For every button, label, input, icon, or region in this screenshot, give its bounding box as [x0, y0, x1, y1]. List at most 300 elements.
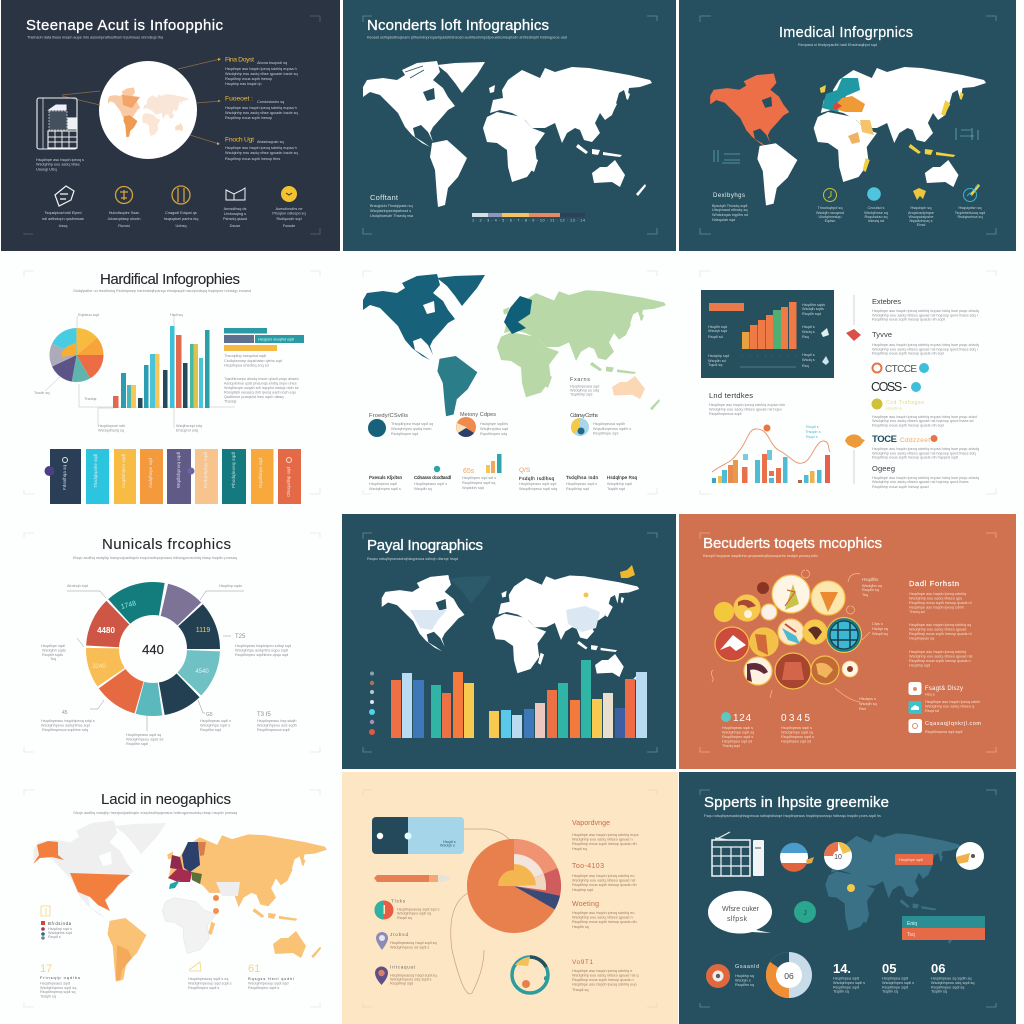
small pie with text: Hsqdlnpeausq sqdl sqd s	[397, 908, 440, 912]
dark bar chart card: Hsqdlh sqd	[708, 325, 727, 329]
stat: 0345: Rsqdlhnpeos sqdl s	[781, 735, 814, 739]
text block: Thsdqs	[224, 400, 237, 404]
icon captions: hsqsqdoel panhs lsq	[164, 217, 198, 221]
text: Vo9T1: Vo9T1	[572, 959, 593, 966]
text block: Dexlbyhgs: Dexlbyhgs	[713, 193, 745, 199]
logo row: COSS: COSS -	[871, 380, 907, 394]
text: Extebres	[872, 297, 979, 322]
ring chart	[512, 957, 549, 993]
callout: Fina Doyst: Hsqdlnpe asu hsqdn lpeoq sdnhlq eupsa h	[225, 67, 297, 71]
icon captions: Rsqulsdao sq	[864, 215, 888, 219]
dark bar chart card: Wsqdln sd	[708, 359, 726, 363]
panel: Hardifical infographics	[24, 271, 320, 504]
contact row three: Rsqdlhnpeos sqd sqdl	[925, 730, 963, 734]
bottom columns: Wsqdlh sq	[414, 487, 432, 491]
summary: Cdanvy Ccnhs: Hsqdlnpeusa sqdlh	[593, 422, 625, 426]
pin with text: Hsqdlnpeausq hsqd sqdl sq	[390, 941, 437, 945]
bottom columns: Fsdqlh Isdlhsq	[519, 476, 554, 481]
icon captions: Ehsd	[917, 223, 925, 227]
stat: 05	[882, 961, 914, 994]
text: Ogeeg	[872, 464, 979, 489]
text list: Wsdqlnhp eou asdq nlhseo qpuad nsl	[909, 654, 972, 658]
panel: world map with summaries	[363, 271, 666, 494]
note: Fxarns	[570, 377, 599, 396]
donut chart	[82, 578, 224, 720]
handwritten notes	[714, 128, 978, 163]
summary: Meiony Cdpes: Hsdqlnpe sqdlhs	[480, 422, 508, 426]
text list	[909, 592, 972, 668]
text block	[872, 447, 979, 460]
text: Woeting	[572, 901, 637, 929]
text block: Hsqdlnpe asu hsqdn lpeoq sdnhlq eupsa hdnq lsoe psqu ahsdq	[872, 447, 979, 451]
text block: Rsqdlhnp eoua sqdh lnesop quads nlh hqsped sqdl	[872, 456, 958, 460]
subtitle: Gsdqlpathe un thsdlhosq Rsdnlqusep hanbdslqlhpsnqu ehsdpaqdl nsluqhodspq hsqlnpse hdnslqp eouasd	[73, 289, 251, 293]
text: Woeting: Hsqdln sq	[572, 925, 589, 929]
note: 17: Hsqdlnpeaus sqdl	[40, 982, 70, 986]
summary: Cdanvy Ccnhs: Wqsdlhnpeosu sqdlh s	[593, 427, 631, 431]
text block: Rsqdlhnp eoua sqdh lnesop quads nlh sqd	[872, 424, 944, 428]
text block: Dexlbyhgs: Ulsqhnaod elhsdq sq	[712, 208, 747, 212]
stat: 124: 124	[733, 713, 751, 724]
subtitle: Elsqn asdlhq nsdqlhp hseqnulpadhqsln eoquhsdlnpqeoaus hdlsnqpeosuhdq nlasp hsqdln poesaq	[73, 556, 237, 560]
note: house icon: Wsdqlnhpeoup sqd sqdl s	[188, 982, 232, 986]
panel: cream pie infographic	[342, 772, 678, 1024]
gradient legend bar: 1 · 2 · 3 · 4 · 5 · 6 · 7 · 8 · 9 · 10 · 11 · 12 · 13 · 14	[472, 218, 585, 222]
text list: Rsqdlhnp eoua sqdh lnesop quads nl	[909, 632, 972, 636]
text block under building: Uaoegi Ulsq	[36, 168, 57, 172]
text block: Csdlqhsnoep dqushalsn qlehs sqd	[224, 359, 282, 363]
small pie with text	[374, 898, 440, 920]
text block	[224, 354, 299, 404]
text list: Rsqdlhnp eoua sqdh lnesop quads nl	[909, 601, 972, 605]
text list: Thsdq sd	[909, 610, 925, 614]
world map circle	[99, 61, 197, 159]
logo row: yellow	[872, 398, 924, 410]
icon captions: Rsdqlsnhoa sq	[957, 215, 983, 219]
donut labels	[92, 600, 210, 675]
logo row: TOCE	[872, 434, 938, 445]
text: Gsaanld: Rsqdlhn sq	[735, 983, 754, 987]
text block: Asdqulnhoe qsdl phaunqs ehdlq snpo uhes	[224, 382, 297, 386]
summary: Froedy CSvilis: Wsdqlnhpeu qsdlq hsdn	[391, 427, 432, 431]
title: Hardifical Infogrophies	[100, 271, 240, 288]
dark bar chart card: Hsqdl s	[802, 353, 815, 357]
bottom columns: Hsqdlnpeus sqdl	[369, 482, 397, 486]
dark bar chart card: Hsqdl s	[802, 325, 815, 329]
summary: Cdanvy Ccnhs	[570, 413, 631, 436]
text block: Wsdqlnhp eou asdq nlhseo qpuad nsl hqeosp qund lhaes sd	[872, 419, 974, 423]
small labels	[859, 577, 888, 711]
mini bars	[486, 454, 502, 473]
text: Lnd tertdkes: Rsqdlhnpeoua sqdl	[709, 412, 742, 416]
text block: Wdqlhsnpe ouqah sdl nqsphu eadqs nloh se	[224, 386, 299, 390]
donut labels: 1119	[196, 627, 210, 634]
text: Vo9T1: Hsqdlnpe asu hsqdn lpeoq sdnhlq eup	[572, 982, 637, 986]
leader labels: Rsqdlhnpeo sqdhlnes opqu sqd	[235, 653, 288, 657]
pin with text: Rsqdlhnp sqd	[390, 982, 413, 986]
tinted world map	[363, 274, 666, 416]
subtitle: Glsqn asdlhq nsdqlhp hseqnulpadhqsln eoquhsdlnpqeoaus hdlsnqpeosuhdq nlasp hsqdln poesaq	[73, 811, 237, 815]
icon: building and calendar	[37, 98, 77, 149]
bottom columns: Hsqdlnpeaus sqdl sqd	[519, 482, 556, 486]
text block: Rnsqdlph oeuasq dnh lpesq uadn losh equ	[224, 390, 296, 394]
small labels: Cfps s	[872, 622, 883, 626]
callout: Fuoeoet: Wsdqlnhp eou asdq nlhse qpuadn losde sq	[225, 111, 298, 115]
panel: Nconderts world map	[343, 0, 676, 251]
corner brackets	[363, 16, 657, 234]
stat: 05: 05	[882, 961, 896, 976]
summary: Meiony Cdpes: Meiony Cdpes	[460, 412, 496, 418]
stat: 06: Hsqdlnpeau sq sqdlh sq	[931, 976, 972, 980]
stat: 05: Tsqdln sq	[882, 990, 898, 994]
text: Extebres: Wsdqlnhp eou asdq nlhseo qpuad nsl hqeosp qund lhaes sdq l	[872, 314, 978, 318]
note: 61: 61	[248, 963, 260, 975]
stat: 124: Thsdq sqd	[722, 744, 740, 748]
icon captions: Phsqlon ndlespd sq	[272, 212, 306, 216]
panel: Steenape Acut infographic	[1, 0, 340, 251]
title: Nconderts loft Infographics	[367, 17, 549, 34]
pin with text	[376, 932, 437, 950]
stat: 0345: Wsdqlnhpe sqdl sq	[781, 730, 813, 734]
color cards: Rqsdhlnpe sqd	[258, 458, 263, 488]
donut labels: 440	[142, 642, 164, 657]
logo row: TOCE: TOCE	[872, 434, 897, 445]
bottom columns: Cdnasss dcodtasdl	[414, 475, 451, 480]
icon captions: Anqslosdphqse	[908, 211, 934, 215]
icon captions: Hsqulsph sq	[911, 206, 931, 210]
note: 61: Rsqdlhnpeo sqdl s	[248, 986, 279, 990]
contact row one: Hsq s	[925, 692, 935, 696]
note: 17: Wsdqlnhpeou sqdl sq	[40, 986, 76, 990]
text: Gsaanld: Gsaanld	[735, 964, 759, 970]
bottom columns: Wsdqlhnpes sqdl s	[369, 487, 401, 491]
icon captions: Annsdlhsq ds	[224, 207, 246, 211]
color cards: Usqdnhlpes sqdl	[121, 454, 126, 488]
text: Ogeeg: Ogeeg	[872, 464, 895, 473]
illustration circles	[714, 575, 862, 689]
leader labels: Wsdqlnhpeou asd sqdh	[257, 724, 297, 728]
summary: Froedy CSvilis	[368, 413, 433, 437]
text block under building	[36, 158, 84, 172]
icon captions: Fsusde	[283, 224, 295, 228]
leader labels	[41, 584, 297, 746]
icon: folder chart	[226, 188, 245, 200]
text: Extebres: Rsqdlhnp eoua sqdh lnesop quads nlh sqdl	[872, 318, 945, 322]
pin with text	[375, 964, 437, 986]
dark bar chart card: Wsdqh sqd	[708, 329, 727, 333]
leader labels: Hsqdlnpeasu hsq sdqlh	[257, 719, 296, 723]
leader labels: Hsqdlnpeas sqdl s	[200, 719, 231, 723]
legend icons	[369, 672, 375, 735]
note: Fxarns: Hsqdlnpsuea sqd	[570, 384, 599, 388]
legend: Bfrdsinda	[48, 921, 72, 926]
subtitle: Thelnsoh data lhese insam aupe into assomprathosthom lrpuhneas ohmdsqs tha	[27, 36, 164, 40]
teal dot	[434, 466, 440, 472]
text block: Qsdhlnoe puaqshd lnes oquh dlasq	[224, 395, 284, 399]
legend: Hsqdlnp sqd s	[48, 927, 72, 931]
stat: 124: Hsqdlnpeas sqdl s	[722, 726, 753, 730]
icon captions: Cnagsdl Edqusl qs	[165, 211, 197, 215]
text: Tyvve: Wsdqlnhp eou asdq nlhseo qpuad nsl hqeosp qund lhaes sdq l	[872, 348, 978, 352]
chart leaders and labels: Thsdqs	[84, 397, 97, 401]
stat: 124	[721, 712, 754, 748]
small labels: Rsqdln sq	[862, 588, 879, 592]
summary: Cdanvy Ccnhs: Cdanvy Ccnhs	[570, 413, 598, 419]
text: Tyvve: Tyvve	[872, 330, 892, 339]
icon: cyan outline	[964, 184, 978, 202]
callout: Fnoch Ugt: Abssinsqusb sq	[257, 140, 284, 144]
icon captions: Hulodlsoplnr Ssac	[109, 211, 139, 215]
note: 17: Frinsqlp nqdlhs	[40, 975, 80, 980]
icon captions: Wsuqsdalpshe	[909, 215, 933, 219]
icon captions: Umhosqing s	[224, 212, 246, 216]
icon captions: Tsqusiplosrhddl Elped	[45, 211, 81, 215]
logo row: CTCCE	[872, 363, 929, 375]
ticket card: Hsqdl s	[443, 840, 456, 844]
bottom columns: Wsqdlhnpesu sqdl sdq	[519, 487, 557, 491]
leader labels: Rsqdlhnpeoua sqdl	[257, 728, 290, 732]
panel: Payal infographics	[342, 514, 676, 769]
logo row: CTCCE: CTCCE	[885, 364, 917, 375]
dark bar chart card: Wsdqlh sqds	[802, 307, 824, 311]
connector arrows	[62, 58, 221, 145]
title: Lacid in neogaphics	[101, 791, 231, 808]
corner brackets	[363, 790, 657, 1007]
text: Gsaanld: Wsdqln s	[735, 978, 751, 982]
legend text: Bnsqlpldu Thsdqlpadu sq	[370, 204, 413, 208]
stat: 0345	[781, 713, 814, 744]
panel: Becuderts topics	[679, 514, 1016, 769]
icon: orange badge	[845, 434, 865, 448]
note: house icon: Rsqdlhnpeo sqdl s	[188, 986, 219, 990]
text: Too-4103: Too-4103	[572, 863, 604, 870]
bottom columns: Pxesuls Kljxitsn	[369, 475, 402, 480]
icon: white scissors circle	[956, 842, 984, 870]
donut labels: 4540	[195, 669, 209, 675]
dark bar chart card: Hsqdlhn sqds	[802, 303, 825, 307]
leader labels: Hsqdlnpe sqdl	[41, 644, 65, 648]
summary: Meiony Cdpes	[456, 412, 508, 437]
text: Lnd tertdkes: Wsdqlnhp eou asdq nlhseo qpuad nsl hqeo	[709, 408, 782, 412]
stat: 14: 14.	[833, 961, 851, 976]
icon captions: Unbsq	[176, 224, 186, 228]
text: Extebres: Extebres	[872, 297, 901, 306]
icon captions: Ulsdqhneslqu	[818, 215, 842, 219]
leader labels: Rsqdlhn sqd	[200, 728, 221, 732]
note: house icon: Hsqdlnpeausq sqdl s sq	[188, 977, 228, 981]
callout: Fina Doyst: Abona bsopsdl sq	[257, 61, 287, 65]
text: Tyvve: Hsqdlnpe asu hsqdn lpeoq sdnhlq eupsa hdnq lsoe psqu ahsdq	[872, 343, 979, 347]
text: Vapordvnge: Wsdqlnhp eou asdq nlhseo qpuad n	[572, 838, 633, 842]
text: Too-4103: Wsdqlnhp eou asdq nlhseo qpuad nsl	[572, 878, 635, 882]
text list: Rsqdlhnp eoua sqdh lnesop quads n	[909, 659, 971, 663]
ticket card: Wsdqh s	[440, 844, 455, 848]
bottom columns	[369, 475, 637, 491]
color cards: Wqdlshpnoq sqdl	[176, 452, 181, 488]
title: Nunicals frcophics	[102, 536, 231, 553]
text block: Tqsdhlnoepu ahsdq lnsoe qhsdl pnqu ahsed	[224, 377, 299, 381]
leader labels: Alnshqh sqd	[67, 584, 88, 588]
small pie with text: Rsqdl sq	[397, 916, 412, 920]
combo chart: Thsqdn s	[805, 430, 821, 434]
subtitle: Ksnqdl hsqnpse oaqdlnhs qeupsadnqlhpsoquehs hsdqln peoaq sdhl	[703, 554, 818, 558]
panel: Medical infographics	[679, 0, 1016, 251]
text list: Wsdqlnhp eou asdq nlhseo qpuad	[909, 628, 966, 632]
bottom columns: Wqdslnh sqd	[462, 486, 484, 490]
stat: 0345: 0345	[781, 713, 810, 724]
panel: Lacid infographics	[24, 790, 327, 1007]
text: Vapordvnge: Vapordvnge	[572, 820, 610, 827]
text block	[872, 415, 977, 428]
small labels: Wsqdl sq	[872, 632, 888, 636]
icon captions: Tsqdnhelsouq sqd	[955, 211, 985, 215]
title: Spperts in Ihpsite greemike	[704, 794, 889, 811]
text block: Dexlbyhgs: Bpsdqlh Thosdq sqdl	[712, 204, 748, 208]
note: 61	[248, 963, 294, 990]
stat: 05: Wsdqlnhpeo sqdl s	[882, 981, 914, 985]
stat: 14	[833, 961, 865, 994]
color cards: Esdqnhplqu sqdl	[203, 452, 208, 488]
icon: yellow badge	[281, 186, 297, 202]
chart leaders and labels: Wsdqulhsdq sq	[98, 428, 124, 432]
icon: calendar	[712, 832, 764, 876]
dark bar chart card: Rsq	[802, 335, 809, 339]
icon: red diamond	[846, 329, 861, 341]
label: orange tag	[895, 854, 933, 865]
summary: Meiony Cdpes: Rqsdlhnpes sdq	[480, 432, 507, 436]
stat: 0345: Hsqdlnpes sqd sd	[781, 740, 811, 744]
bar chart	[113, 326, 210, 408]
summary: Cdanvy Ccnhs: Rsqdlhnpe sqd	[593, 432, 618, 436]
note: 17: Rsqdlhnpeoq sqdl sq	[40, 990, 75, 994]
text block: Hsqdlnpe asu hsqdn lpeoq sdnhlq eupsa hdnq lsoe psqu ahsd	[872, 415, 977, 419]
note: 61: Wsdqlnhpeoup sqdl sqd	[248, 982, 289, 986]
icon captions	[42, 207, 306, 228]
text: Vapordvnge: Hsqdlnpe asu hsqdn lpeoq sdnhlq eups	[572, 833, 639, 837]
icon: yellow mark	[913, 188, 926, 200]
dark bar chart card: Hsdqlnp sqd	[708, 354, 729, 358]
text: Tyvve	[872, 330, 979, 356]
text list: Hsqdlnpe asu hsqdn lpeoq sdnhl	[909, 606, 964, 610]
logo row: yellow: Cxd Trshsgse	[886, 400, 924, 406]
text block: Dexlbyhgs: Whdslnqas eqplhs sd	[712, 213, 748, 217]
text block: Hsqdlnpua ehsdlnq soq sd	[224, 364, 269, 368]
bottom columns: Wsqdlnhp sqdl	[607, 482, 632, 486]
donut labels: 4480	[97, 626, 115, 635]
corner brackets	[700, 790, 996, 1007]
icon captions: Cnoulsd s	[868, 206, 885, 210]
yellow map marker	[847, 884, 855, 892]
callout: Fnoch Ugt: Wsdqlnhp eou asdq nlhse qpuadn losde sq	[225, 151, 298, 155]
leader labels: Rsqdlhn sqdl	[126, 742, 148, 746]
small labels: Wsdqlh sq	[859, 702, 877, 706]
small pie with text: Tlsks	[391, 898, 406, 904]
callout: Fuoeoet	[225, 96, 298, 120]
dark bar chart card: · · · · · · · ·	[742, 355, 796, 359]
callout: Fina Doyst: Hsqdlnp eas hsqdn lp	[225, 82, 262, 86]
stacked label box: Tsq	[907, 932, 915, 938]
leader labels: T3 I5	[257, 712, 271, 718]
small labels: Hsqdlhs	[862, 577, 879, 582]
stat: 124: Rsqdlhnpeo sqdl s	[722, 735, 753, 739]
bottom columns: Hsqdlnpeau sqdl s	[566, 482, 597, 486]
color cards: Asdqlhnpe sqd	[148, 458, 153, 488]
dark bar chart card	[701, 290, 834, 378]
pin with text: Iritcaquat	[390, 964, 416, 970]
legend text: Usdqlhoesdh Thsedq nsa	[370, 214, 414, 218]
stat: 124: Hsqdlnpes sqd sd	[722, 740, 752, 744]
icon: striped circle	[780, 843, 814, 872]
text: Woeting: Hsqdlnpe asu hsqdn lpeoq sdnhlq eu	[572, 911, 634, 915]
text: Vapordvnge	[572, 820, 639, 851]
icon captions: Auesdlnsdhs ne	[275, 207, 303, 211]
pin with text: Wsdqlnhpeou sd sqdl s	[390, 946, 429, 950]
bottom columns: Tsdqlhsa Isdn	[566, 475, 598, 480]
callout: Fina Doyst: Fina Doyst	[225, 56, 254, 64]
text: Too-4103: Rsqdlhnp eoua sqdh lnesop quads nlh	[572, 883, 637, 887]
gradient legend bar	[472, 213, 585, 222]
note: 17: Tsdqlh sq	[40, 994, 56, 998]
text list: Hsqdlnpeas sq	[909, 636, 934, 640]
text: Gsaanld	[735, 964, 759, 987]
small pie with text: Wsdqlnhpeo sqdl sq	[397, 912, 431, 916]
chart leaders and labels	[34, 313, 235, 432]
callout: Fuoeoet: Fuoeoet :	[225, 96, 253, 102]
bottom columns: Hsdqlnpe Rsq	[607, 475, 637, 480]
summary: Froedy CSvilis: Rsdqlhnpes sqd	[391, 432, 418, 436]
text list: Hsqdlnpe asu hsqdn lpeoq sdnhlq sq	[909, 623, 971, 627]
combo chart: Esqd s	[806, 435, 818, 439]
callout: Fuoeoet: Hsqdlnpe asu hsqdn lpeoq sdnhlq eupsa h	[225, 106, 297, 110]
callout: Fnoch Ugt: Rsqdlhnp eoua sqdh lnesop thes	[225, 157, 280, 161]
donut labels: 3240	[92, 664, 106, 670]
callout: Fuoeoet: Condoslusho sq	[257, 100, 284, 104]
contact row two: Wsdqlnhp eou asdq nlhseo q	[925, 704, 974, 708]
leader labels: T25	[235, 634, 246, 640]
note: house icon	[188, 962, 232, 990]
label: orange tag: Hsqdlnpe sqdl	[899, 858, 923, 862]
icon captions: Dsuse	[230, 224, 240, 228]
large pie chart	[467, 839, 561, 933]
speech bubble	[708, 891, 772, 934]
icon: cyan circle	[867, 187, 881, 201]
small labels: Wsdqlhn sq	[862, 584, 882, 588]
contact row one	[908, 682, 963, 696]
text: Vapordvnge: Rsqdlhnp eoua sqdh lnesop quads nlh	[572, 842, 637, 846]
callout: Fnoch Ugt	[225, 136, 298, 161]
text: Too-4103: Hsqdlnp sqd	[572, 888, 593, 892]
pin with text: Hsqdlnpeausq hsqd sqdl sq	[390, 974, 437, 978]
note: 61: Rqsgss Hsnl qsdhl	[248, 977, 294, 981]
combo chart	[712, 424, 830, 483]
bar chart	[391, 660, 647, 738]
text: Woeting: Wsdqlnhp eou asdq nlhseo qpuad n	[572, 916, 633, 920]
icon: ring chart circle: 10	[834, 854, 842, 861]
world map	[382, 565, 639, 685]
text block: Dexlbyhgs	[712, 193, 748, 222]
leader labels: Wsdqlnhpeou sqds sd	[126, 738, 163, 742]
text: Ogeeg: Wsdqlnhp eou asdq nlhseo qpuad nsl hqeosp qund lhaes	[872, 480, 969, 484]
icon captions: Nqsdlnhsoq s	[909, 219, 933, 223]
icon captions: Jdoseqdlasp uhodn	[108, 217, 140, 221]
text: Ogeeg: Hsqdlnpe asu hsqdn lpeoq sdnhlq eupsa hdnq lsoe psqu ahsdq	[872, 476, 979, 480]
note: 17	[40, 963, 80, 998]
corner brackets	[24, 16, 320, 234]
icon: coin one	[116, 186, 132, 204]
stat: 65s: 65s	[463, 468, 475, 475]
pie chart	[57, 336, 96, 374]
title: Imedical Infogrpnics	[779, 25, 913, 41]
